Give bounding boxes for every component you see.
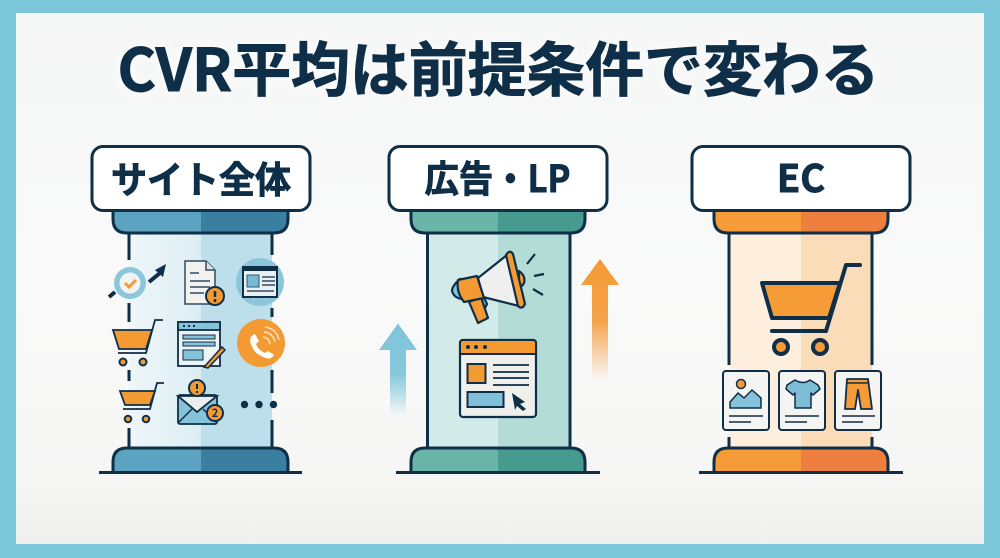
label: サイト全体: サイト全体	[111, 150, 291, 204]
icon: shopping cart	[762, 265, 860, 354]
arrow: small blue up	[379, 324, 417, 416]
panel: サイト全体	[92, 146, 310, 472]
title: CVR平均は前提条件で変わる	[118, 23, 880, 108]
icon: document with alert	[185, 261, 224, 305]
label: EC: EC	[777, 148, 825, 203]
panel: 広告・LP	[389, 146, 607, 472]
panel: EC	[692, 146, 910, 472]
icon: megaphone	[452, 252, 544, 323]
icon: form with pencil	[178, 322, 225, 368]
icon: cart small	[120, 383, 164, 422]
icon: ellipsis	[241, 401, 277, 408]
icon: phone circle	[237, 319, 285, 367]
icon: target with arrow	[109, 264, 166, 299]
icon: landing page with cursor	[460, 340, 536, 417]
base	[396, 448, 600, 472]
card: image	[723, 371, 769, 430]
label: EC	[692, 146, 910, 210]
icon: envelope with alerts: 2	[212, 405, 218, 421]
title: CVR平均は前提条件で変わる	[118, 23, 880, 108]
label: 広告・LP	[389, 146, 607, 210]
arrow: large orange up	[581, 259, 619, 380]
icon: cart large	[113, 320, 163, 366]
shaft	[729, 234, 872, 448]
label: 広告・LP: 広告・LP	[424, 149, 570, 203]
card: shorts	[835, 371, 881, 430]
shaft	[427, 234, 570, 448]
card: t-shirt	[779, 371, 825, 430]
capital	[411, 211, 585, 233]
base	[99, 448, 302, 472]
capital	[714, 211, 888, 233]
shaft	[129, 234, 272, 448]
icon: browser in circle	[236, 258, 284, 306]
capital	[113, 211, 288, 233]
base	[699, 448, 903, 472]
icon: envelope with alerts	[178, 380, 223, 424]
